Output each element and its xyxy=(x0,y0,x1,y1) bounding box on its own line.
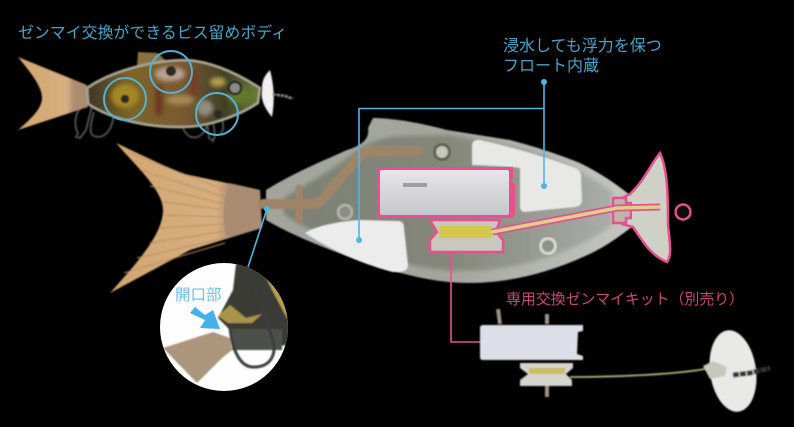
inset white circle xyxy=(160,263,288,391)
large cutaway fish xyxy=(110,118,690,293)
line connector block xyxy=(613,198,631,223)
case marking xyxy=(403,183,427,187)
inset tail xyxy=(163,332,232,383)
small fish dorsal fin xyxy=(137,52,166,67)
screw post top xyxy=(434,144,450,160)
kit pins xyxy=(498,309,547,397)
small fish swivel xyxy=(273,94,293,99)
float label text: 浸水しても浮力を保つ xyxy=(503,37,662,55)
icon: blue arrow xyxy=(190,307,220,329)
small fish body xyxy=(87,60,260,127)
small fish internal colour patches xyxy=(111,67,252,116)
small fish lure with highlighted screws xyxy=(18,51,293,141)
tube xyxy=(263,151,418,220)
small fish eye xyxy=(229,82,241,94)
spool xyxy=(430,220,503,252)
small fish lip xyxy=(262,70,274,117)
kit spool xyxy=(520,363,573,386)
inset: opening detail xyxy=(160,262,290,391)
kit case xyxy=(480,325,583,360)
inset label: 開口部 xyxy=(175,286,222,304)
large fish dorsal fin and body shell xyxy=(266,118,633,283)
float leader dots xyxy=(264,79,547,243)
small fish screws xyxy=(121,66,222,118)
small fish tail xyxy=(18,57,88,130)
large fish tail xyxy=(110,143,262,293)
inset hook xyxy=(228,328,276,370)
large fish inner cavity xyxy=(284,135,612,271)
pull ring xyxy=(676,204,690,220)
kit lip disk xyxy=(705,327,761,415)
lip xyxy=(622,153,670,262)
spring case xyxy=(377,167,515,218)
heading: body with screw fixing: ゼンマイ交換ができるビス留めボディ xyxy=(18,23,287,42)
kit line xyxy=(570,369,705,377)
small fish hooks xyxy=(75,105,223,141)
left float xyxy=(305,220,408,272)
blue highlight circles xyxy=(104,51,238,135)
kit leader line xyxy=(451,252,483,342)
float label text: フロート内蔵 xyxy=(503,57,599,75)
kit connector xyxy=(703,361,727,379)
right float xyxy=(472,140,582,212)
spring line xyxy=(492,207,660,232)
inset fish body xyxy=(218,262,290,348)
float leader lines xyxy=(248,82,544,267)
inset photo xyxy=(163,262,290,383)
kit label text: 専用交換ゼンマイキット（別売り） xyxy=(506,291,744,308)
label: float xyxy=(248,37,662,267)
kit swivel xyxy=(733,368,770,375)
screw post bottom xyxy=(540,238,556,254)
label: replacement kit xyxy=(451,252,744,342)
replacement spring kit xyxy=(480,309,770,415)
screw post rear xyxy=(338,205,352,219)
